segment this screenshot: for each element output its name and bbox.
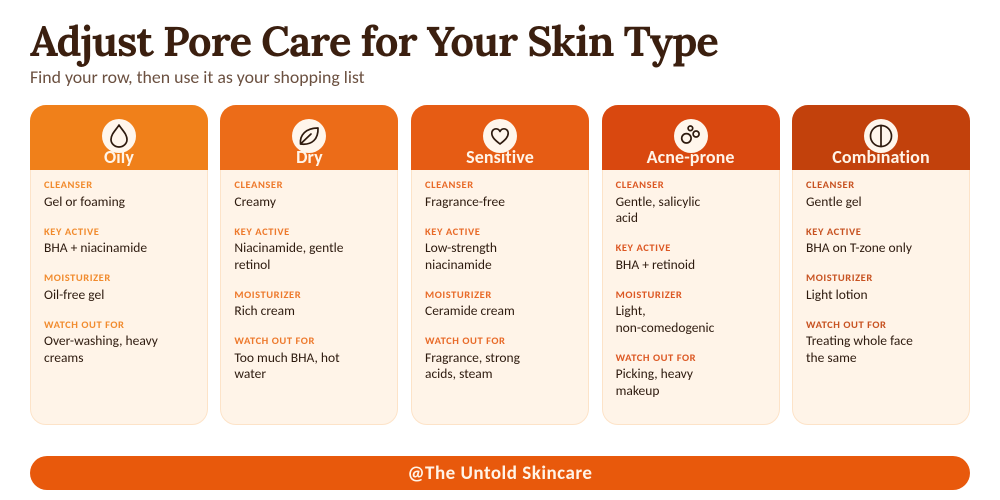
text: oily details: MOISTURIZER — [44, 271, 111, 284]
header: combination — [792, 105, 970, 170]
footer banner: @The Untold Skincare — [407, 462, 593, 485]
text: acne-prone details: MOISTURIZER — [616, 288, 682, 300]
text: oily details: Oil-free gel — [44, 286, 104, 302]
text: oily details: WATCH OUT FOR — [44, 318, 125, 330]
text: sensitive details: CLEANSER — [425, 178, 474, 191]
name: acne-prone: Acne-prone — [647, 146, 735, 168]
icon: heart — [483, 119, 517, 153]
panel: oily — [30, 105, 208, 425]
text: acne-prone details: KEY ACTIVE — [616, 241, 671, 254]
text: combination details: CLEANSER — [806, 178, 855, 191]
text: combination details: Treating whole face — [806, 332, 913, 349]
text: combination details: KEY ACTIVE — [806, 224, 861, 238]
text: dry details: Too much BHA, hot — [234, 348, 340, 366]
title: Adjust Pore Care for Your Skin Type — [30, 14, 718, 68]
text: oily details: KEY ACTIVE — [44, 224, 99, 238]
text: dry details: Creamy — [234, 192, 276, 210]
text: combination details: the same — [806, 348, 857, 366]
icon: bubbles — [674, 119, 708, 153]
text: sensitive details: acids, steam — [425, 365, 493, 382]
text: acne-prone details: WATCH OUT FOR — [616, 350, 696, 364]
text: dry details: water — [234, 365, 266, 382]
text: acne-prone details: BHA + retinoid — [616, 256, 695, 272]
text: sensitive details: Low-strength — [425, 239, 497, 256]
header: sensitive — [411, 105, 589, 170]
text: oily details: CLEANSER — [44, 178, 93, 191]
text: oily details: creams — [44, 348, 84, 366]
name: dry: Dry — [296, 146, 323, 168]
text: acne-prone details: acid — [616, 209, 638, 226]
text: oily details — [44, 178, 158, 366]
text: sensitive details: KEY ACTIVE — [425, 224, 480, 238]
name: combination: Combination — [832, 146, 930, 168]
panel: acne-prone — [602, 105, 780, 425]
text: combination details: MOISTURIZER — [806, 271, 873, 284]
panel: combination — [792, 105, 970, 425]
text: dry details: retinol — [234, 256, 270, 272]
subtitle: Find your row, then use it as your shopping list — [30, 66, 365, 88]
text: dry details: Niacinamide, gentle — [234, 239, 343, 256]
header: dry — [220, 105, 398, 170]
name: oily: Oily — [104, 146, 134, 168]
text: combination details: Light lotion — [806, 286, 868, 302]
text: acne-prone details: makeup — [616, 382, 659, 398]
icon: water drop — [102, 119, 136, 153]
footer banner — [30, 456, 970, 490]
text: oily details: Gel or foaming — [44, 192, 125, 210]
text: combination details: Gentle gel — [806, 192, 862, 210]
text: sensitive details: niacinamide — [425, 256, 492, 272]
text: acne-prone details: Picking, heavy — [616, 365, 693, 382]
text: acne-prone details — [616, 178, 714, 398]
name: sensitive: Sensitive — [466, 146, 534, 168]
text: sensitive details: MOISTURIZER — [425, 288, 492, 300]
icon: half circle — [864, 119, 898, 153]
text: combination details: WATCH OUT FOR — [806, 318, 887, 330]
text: combination details: BHA on T-zone only — [806, 239, 912, 256]
text: dry details — [234, 178, 343, 382]
text: acne-prone details: Light, — [616, 302, 646, 319]
header: acne-prone — [602, 105, 780, 170]
text: dry details: WATCH OUT FOR — [234, 334, 315, 347]
text: sensitive details: Fragrance-free — [425, 192, 505, 210]
text: dry details: MOISTURIZER — [234, 288, 301, 300]
text: sensitive details: Ceramide cream — [425, 302, 515, 319]
text: sensitive details: WATCH OUT FOR — [425, 334, 506, 347]
text: dry details: KEY ACTIVE — [234, 224, 290, 238]
text: sensitive details — [425, 178, 520, 382]
text: oily details: Over-washing, heavy — [44, 332, 158, 349]
header: oily — [30, 105, 208, 170]
text: dry details: Rich cream — [234, 302, 295, 319]
text: oily details: BHA + niacinamide — [44, 239, 147, 256]
text: combination details — [806, 178, 913, 366]
text: dry details: CLEANSER — [234, 178, 283, 191]
text: acne-prone details: non-comedogenic — [616, 318, 714, 336]
panel: sensitive — [411, 105, 589, 425]
text: sensitive details: Fragrance, strong — [425, 348, 520, 366]
text: acne-prone details: CLEANSER — [616, 178, 664, 191]
icon: leaf — [292, 119, 326, 153]
text: acne-prone details: Gentle, salicylic — [616, 192, 700, 210]
panel: dry — [220, 105, 398, 425]
